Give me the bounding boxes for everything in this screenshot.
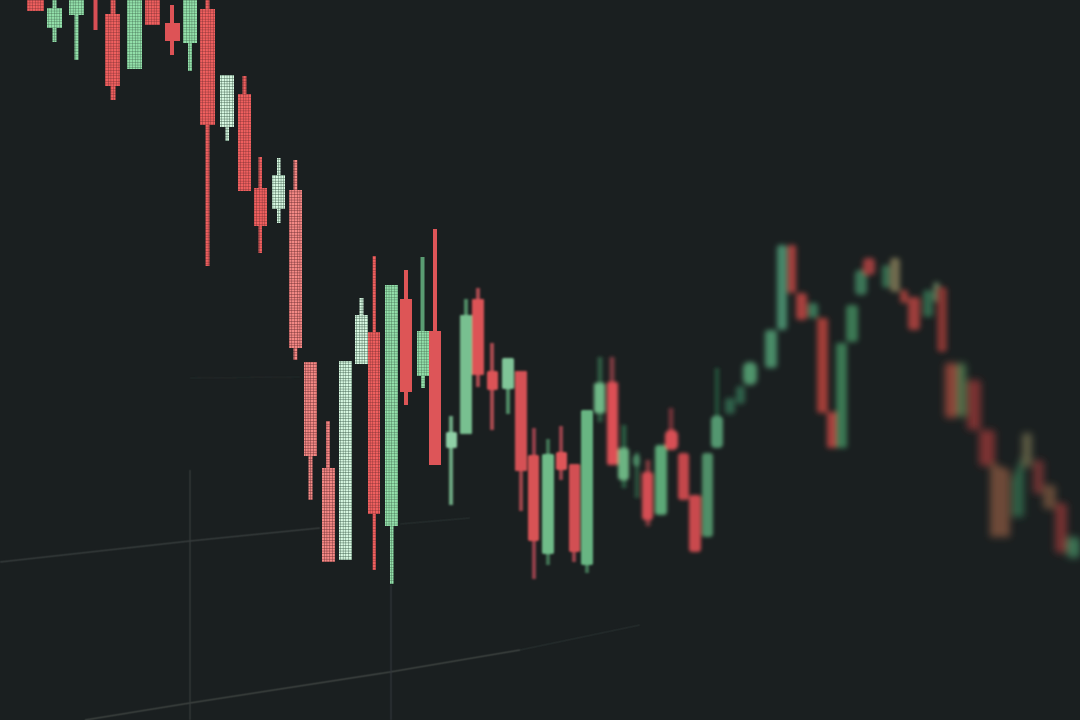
sharp dot-matrix candles: upper left descent — [27, 0, 302, 360]
moderately blurred candles — [594, 357, 723, 552]
most blurred candles at far right — [945, 363, 1080, 558]
sharp dot-matrix candles: central cluster — [304, 229, 441, 584]
grid lines — [0, 377, 640, 720]
blurred candles rising to the right — [725, 245, 947, 448]
slightly soft candles: mid section — [446, 288, 593, 579]
